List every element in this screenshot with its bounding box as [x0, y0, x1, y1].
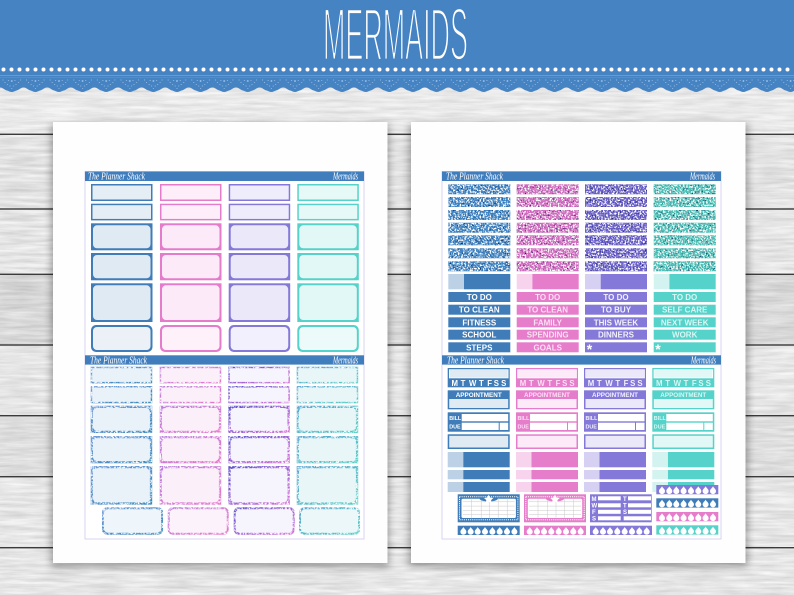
teal half box: [654, 274, 716, 289]
purple weekly checklist: F: [592, 510, 596, 516]
purple labels: TO BUY: [601, 306, 632, 315]
drop strip: right purple: [656, 485, 718, 494]
column: pink box stickers: [160, 184, 222, 352]
pink half box: [517, 274, 579, 289]
blue functional column: DUE: [449, 424, 461, 430]
sheet header 2: The Planner Shack: [90, 355, 147, 366]
pink star tracker: [524, 494, 586, 522]
glitter box frames: [91, 367, 360, 535]
pink labels: SPENDING: [527, 331, 569, 340]
purple functional column: BILL: [586, 416, 598, 422]
purple functional column: MTWTFSS: [588, 379, 643, 388]
glitter box fills: [92, 368, 358, 533]
sheet header: The Planner Shack: [88, 172, 145, 182]
blue labels: TO CLEAN: [459, 306, 500, 315]
purple weekly checklist: M: [592, 497, 596, 503]
sheet header 2: [442, 355, 721, 366]
sheet header: Mermaids: [332, 172, 358, 182]
lace border: [0, 73, 794, 93]
purple weekly checklist: S: [592, 516, 596, 522]
pink labels: TO CLEAN: [527, 306, 568, 315]
sheet outline: [442, 172, 721, 539]
blue labels: STEPS: [466, 343, 493, 352]
purple labels: DINNERS: [598, 331, 635, 340]
blue functional column: [448, 368, 510, 492]
blue functional column: APPOINTMENT: [456, 392, 502, 399]
purple functional column: APPOINTMENT: [592, 392, 639, 399]
purple labels: [585, 292, 647, 357]
panel: right page: [411, 122, 746, 563]
purple weekly checklist: T: [623, 503, 627, 509]
purple weekly checklist: W: [592, 503, 598, 509]
teal functional column: [652, 368, 714, 492]
sheet header 2: Mermaids: [332, 355, 358, 366]
sheet header: [442, 172, 721, 182]
pink functional column: APPOINTMENT: [524, 392, 571, 399]
drop strip: right blue: [656, 498, 718, 508]
sheet header: The Planner Shack: [446, 172, 503, 182]
header banner: [0, 0, 794, 74]
purple weekly checklist: T: [623, 497, 627, 503]
purple functional column: DUE: [586, 424, 597, 430]
purple labels: THIS WEEK: [594, 318, 638, 327]
blue labels: [448, 292, 510, 352]
pink labels: [517, 292, 579, 352]
dotted trim: [2, 68, 790, 72]
pink functional column: DUE: [518, 424, 529, 430]
glitter strips: [448, 184, 716, 271]
teal labels: [654, 292, 716, 357]
sheet header 2: The Planner Shack: [447, 355, 504, 366]
panel: left page: [53, 122, 388, 563]
purple functional column: [584, 368, 646, 492]
purple labels: *: [587, 341, 593, 357]
teal functional column: APPOINTMENT: [660, 392, 707, 399]
purple half box: [585, 274, 647, 289]
sheet header 2: [85, 355, 364, 366]
purple weekly checklist: [590, 494, 652, 522]
pink functional column: MTWTFSS: [520, 379, 575, 388]
pink functional column: [516, 368, 578, 492]
teal functional column: DUE: [654, 424, 666, 430]
drop strip: blue: [458, 526, 520, 535]
teal labels: TO DO: [672, 293, 697, 302]
column: purple box stickers: [229, 184, 290, 352]
drop strip: right teal: [656, 525, 718, 535]
column: blue box stickers: [91, 184, 152, 352]
teal labels: SELF CARE: [662, 306, 708, 315]
sheet header: [85, 172, 364, 182]
blue labels: TO DO: [467, 293, 492, 302]
teal functional column: BILL: [654, 416, 666, 422]
drop strip: pink: [524, 526, 586, 535]
teal labels: *: [655, 341, 661, 357]
teal labels: NEXT WEEK: [661, 318, 709, 327]
blue functional column: MTWTFSS: [451, 379, 506, 388]
pink labels: TO DO: [535, 293, 560, 302]
blue labels: FITNESS: [462, 318, 497, 327]
teal functional column: MTWTFSS: [656, 379, 711, 388]
pink functional column: BILL: [518, 416, 530, 422]
teal labels: WORK: [672, 331, 698, 340]
blue functional column: BILL: [449, 416, 462, 422]
drop strip: right pink: [656, 512, 718, 521]
blue star tracker: [458, 494, 520, 522]
purple weekly checklist: S: [623, 510, 627, 516]
drop strip: purple: [590, 526, 652, 535]
sheet outline: [85, 172, 364, 539]
column: teal box stickers: [297, 184, 359, 352]
blue half box: [448, 274, 510, 289]
purple labels: TO DO: [603, 293, 629, 302]
pink labels: FAMILY: [533, 318, 563, 327]
blue labels: SCHOOL: [462, 331, 497, 340]
pink labels: GOALS: [533, 343, 563, 352]
sheet header 2: Mermaids: [690, 355, 716, 366]
sheet header: Mermaids: [689, 172, 715, 182]
page shadows: [51, 124, 748, 567]
